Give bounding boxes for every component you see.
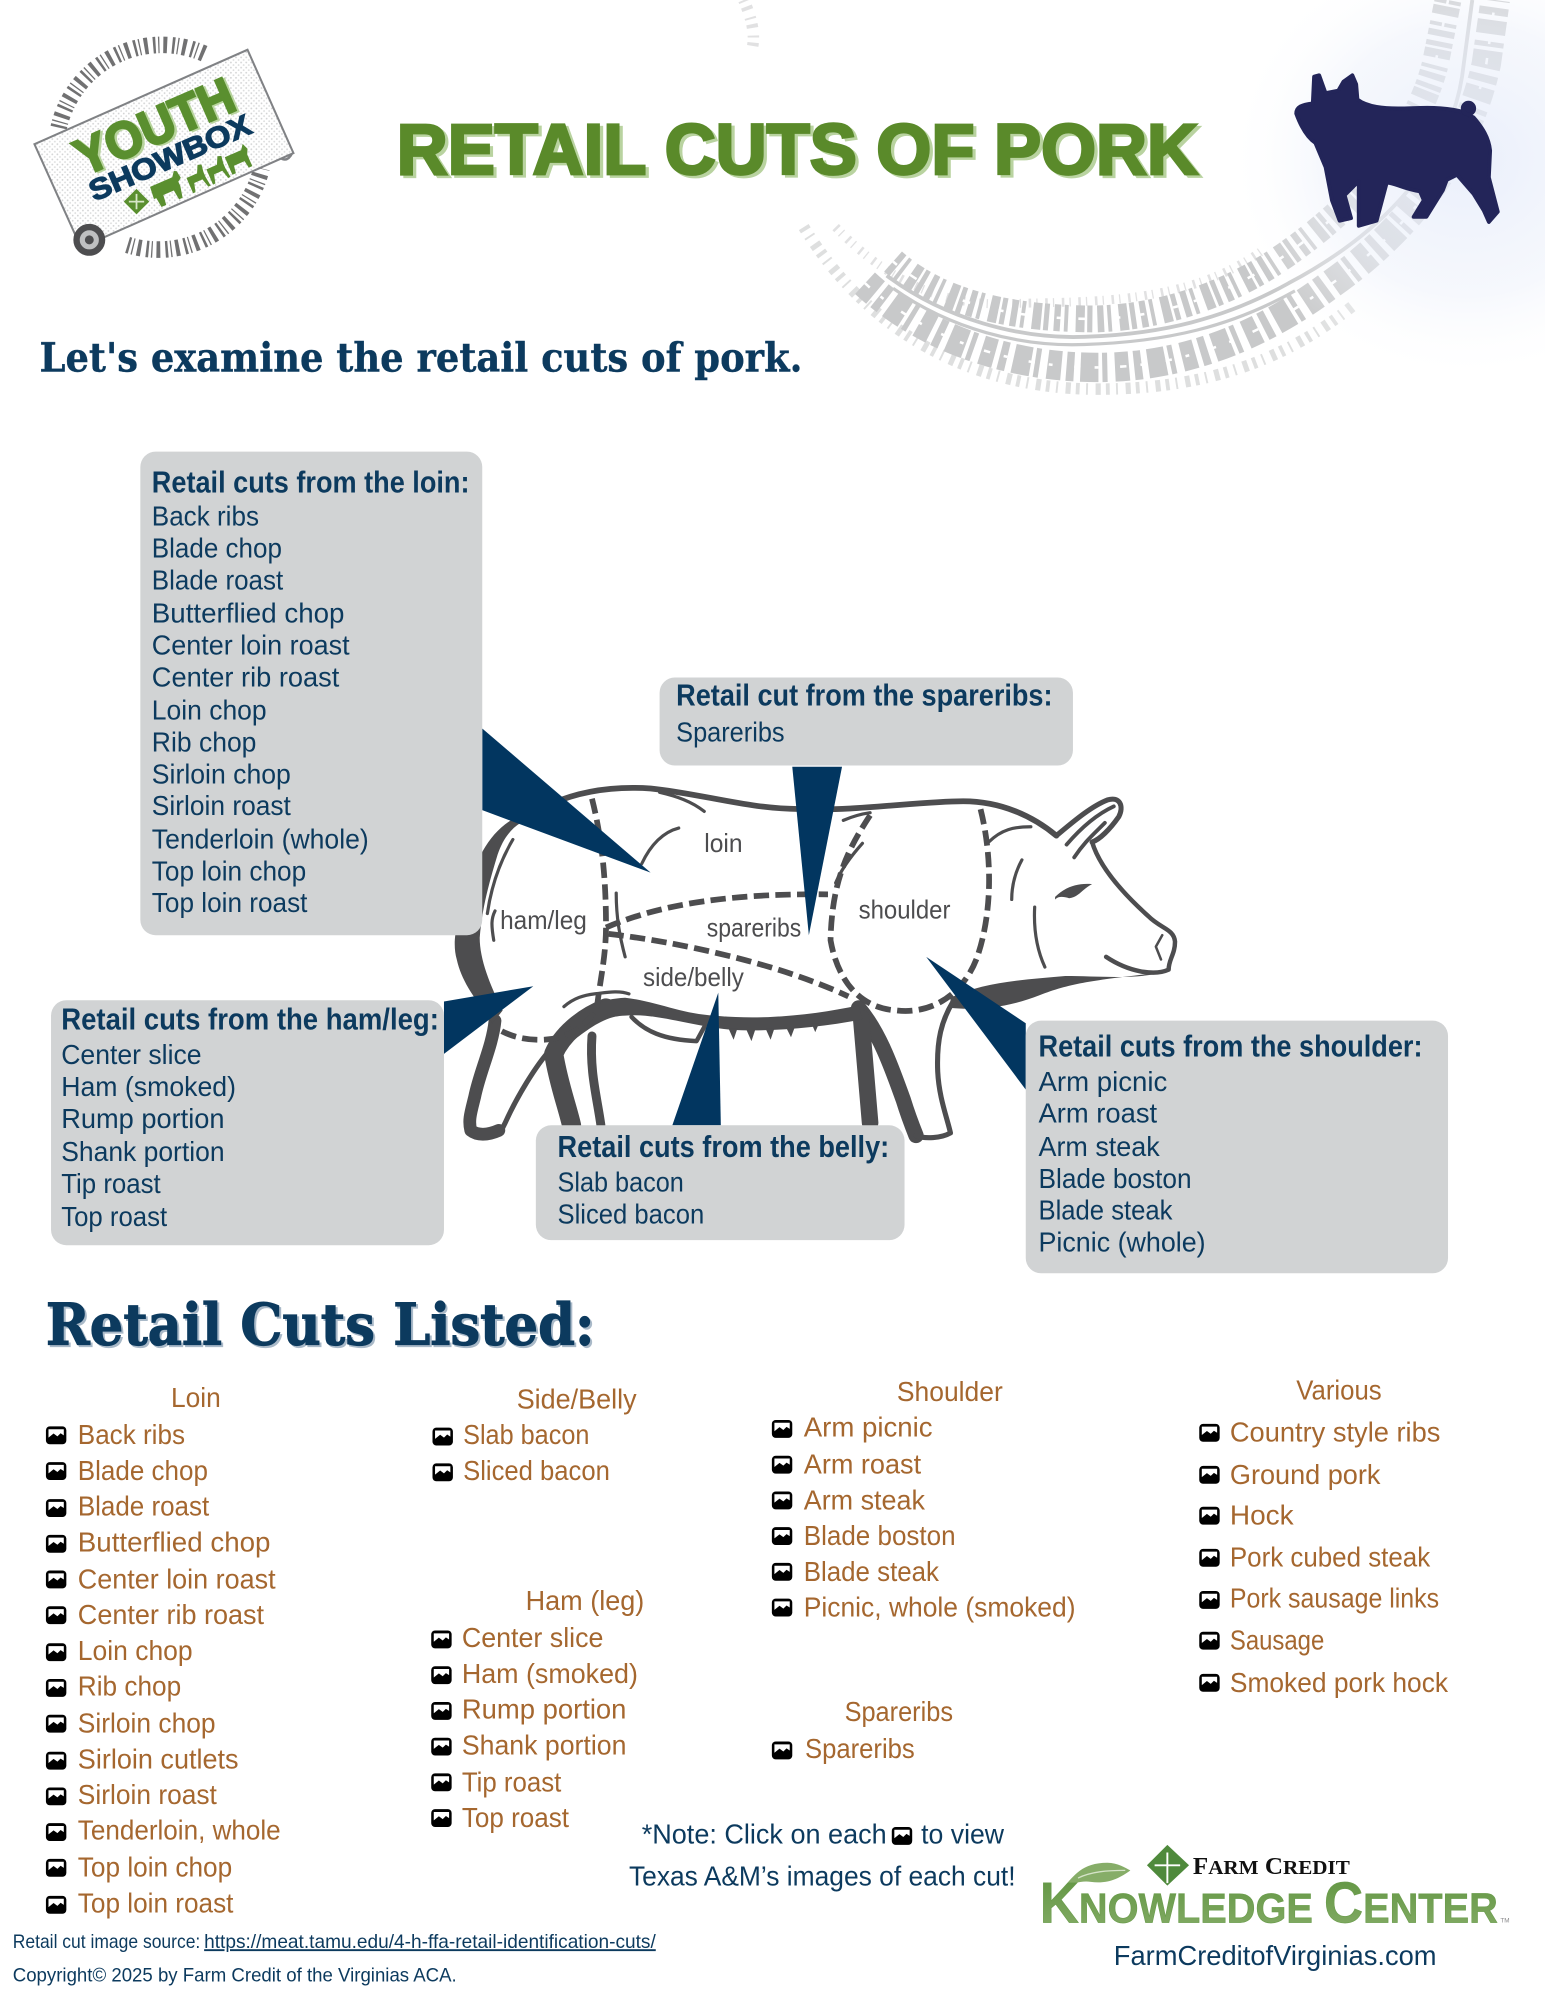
logo: Youth Showbox [34, 45, 293, 253]
list: loin: Sirloin roast [78, 1779, 217, 1810]
panel: loin cuts: Top loin chop [152, 855, 306, 886]
list: spareribs [772, 1696, 953, 1764]
list: shoulder [772, 1376, 1076, 1622]
note: to view [921, 1819, 1005, 1850]
arrow: spareribs pointer [792, 767, 842, 935]
list: various: Hock [1230, 1500, 1295, 1531]
list: ham (leg): Top roast [462, 1802, 569, 1833]
list: loin: Center loin roast [78, 1563, 276, 1594]
panel: shoulder cuts: Arm roast [1039, 1098, 1157, 1129]
list: ham (leg): Ham (smoked) [462, 1658, 638, 1689]
list: shoulder: Blade steak [804, 1556, 940, 1587]
list: loin: Top loin chop [78, 1852, 232, 1883]
list: ham (leg): Center slice [462, 1622, 603, 1653]
list: shoulder: Arm steak [804, 1484, 926, 1515]
list: various: Ground pork [1230, 1459, 1381, 1490]
panel: spareribs cut: Retail cut from the spareribs: [676, 679, 1053, 713]
panel: spareribs cut: Spareribs [676, 716, 785, 747]
panel: shoulder cuts [1026, 1021, 1448, 1273]
panel: loin cuts: Sirloin roast [152, 790, 291, 821]
list: loin: Tenderloin, whole [78, 1815, 281, 1846]
panel: ham/leg cuts: Retail cuts from the ham/leg: [61, 1003, 439, 1037]
panel: shoulder cuts: Arm steak [1039, 1131, 1161, 1162]
list: various: Pork cubed steak [1230, 1542, 1431, 1573]
image source credit: https://meat.tamu.edu/4-h-ffa-retail-identification-cuts/ [204, 1932, 656, 1953]
subtitle: Let's examine the retail cuts of pork. [40, 334, 802, 381]
panel: loin cuts: Blade roast [152, 564, 283, 595]
list: various [1199, 1375, 1449, 1698]
list: spareribs: Spareribs [805, 1733, 915, 1764]
panel: shoulder cuts: Picnic (whole) [1039, 1227, 1206, 1258]
panel: belly cuts: Sliced bacon [558, 1199, 704, 1230]
heading: Retail Cuts Listed: Retail Cuts Listed: [48, 1293, 596, 1361]
list: shoulder: Arm roast [804, 1449, 921, 1480]
list: loin: Rib chop [78, 1671, 181, 1702]
pig region labels: loin [704, 830, 743, 858]
list: shoulder: Shoulder [897, 1376, 1003, 1407]
title: RETAIL CUTS OF PORK [400, 113, 1201, 193]
panel: loin cuts: Blade chop [152, 533, 282, 564]
panel: loin cuts: Center rib roast [152, 661, 340, 692]
pig region labels: ham/leg [500, 907, 587, 935]
list: side/belly: Slab bacon [463, 1419, 589, 1450]
panel: ham/leg cuts: Rump portion [61, 1103, 225, 1134]
list: loin: Blade chop [78, 1455, 208, 1486]
pig region labels: spareribs [707, 914, 801, 942]
pig region labels: shoulder [859, 897, 951, 925]
panel: shoulder cuts: Blade boston [1039, 1163, 1192, 1194]
pig cut lines [499, 799, 989, 1040]
arrow: loin pointer [482, 729, 651, 873]
icon: navy pig silhouette [1296, 75, 1498, 226]
list: side/belly: Side/Belly [517, 1384, 637, 1415]
panel: loin cuts: Rib chop [152, 726, 256, 757]
logo: Youth Showbox: YOUTH [68, 68, 246, 187]
arrow: belly pointer [672, 993, 721, 1125]
logo: Farm Credit Knowledge Center: KNOWLEDGE CENTER [1040, 1872, 1498, 1936]
panel: loin cuts: Loin chop [152, 695, 267, 726]
list: ham (leg): Ham (leg) [526, 1585, 644, 1616]
logo: Farm Credit Knowledge Center: FARM CREDIT [1193, 1853, 1350, 1880]
background tire track and blue glow [744, 0, 1495, 389]
panel: ham/leg cuts: Tip roast [61, 1168, 161, 1199]
arrow: shoulder pointer [926, 957, 1026, 1090]
panel: ham/leg cuts: Shank portion [61, 1136, 225, 1167]
panel: loin cuts: Back ribs [152, 501, 259, 532]
list: side/belly: Sliced bacon [463, 1455, 610, 1486]
panel: belly cuts: Slab bacon [558, 1167, 684, 1198]
list: loin: Butterflied chop [78, 1526, 270, 1557]
heading: Retail Cuts Listed: Retail Cuts Listed: [46, 1291, 595, 1359]
title: RETAIL CUTS OF PORK [397, 110, 1198, 190]
panel: loin cuts: Retail cuts from the loin: [152, 465, 469, 499]
panel: loin cuts: Tenderloin (whole) [152, 823, 369, 854]
list: loin: Blade roast [78, 1491, 209, 1522]
list: side/belly [432, 1384, 637, 1486]
list: shoulder: Arm picnic [804, 1412, 933, 1443]
list: various: Sausage [1230, 1625, 1324, 1656]
list: loin: Back ribs [78, 1419, 185, 1450]
logo: Farm Credit Knowledge Center: TM [1500, 1918, 1510, 1925]
copyright: Copyright© 2025 by Farm Credit of the Virginias ACA. [13, 1965, 457, 1986]
note: Texas A&M’s images of each cut! [629, 1861, 1016, 1892]
panel: shoulder cuts: Retail cuts from the shoulder: [1039, 1029, 1423, 1063]
panel: belly cuts: Retail cuts from the belly: [558, 1130, 889, 1164]
list: ham (leg) [431, 1585, 644, 1833]
pig underside [455, 817, 1164, 1041]
list: various: Smoked pork hock [1230, 1667, 1449, 1698]
arrow: ham pointer [444, 986, 533, 1054]
background blue glow [1225, 0, 1545, 383]
list: loin: Loin chop [78, 1635, 193, 1666]
list: shoulder: Picnic, whole (smoked) [804, 1591, 1076, 1622]
list: shoulder: Blade boston [804, 1520, 956, 1551]
pig diagram [455, 788, 1175, 1138]
list: various: Pork sausage links [1230, 1583, 1439, 1614]
panel: ham/leg cuts: Ham (smoked) [61, 1071, 236, 1102]
list: loin: Sirloin chop [78, 1708, 216, 1739]
list: loin: Sirloin cutlets [78, 1743, 239, 1774]
note [629, 1819, 1016, 1892]
list: spareribs: Spareribs [845, 1696, 953, 1727]
logo: Youth Showbox: SHOWBOX [84, 108, 257, 208]
list: ham (leg): Shank portion [462, 1729, 626, 1760]
panel: shoulder cuts: Arm picnic [1039, 1066, 1167, 1097]
logo: Youth Showbox: YOUTH [66, 67, 243, 186]
list: various: Country style ribs [1230, 1417, 1440, 1448]
list: loin: Loin [171, 1382, 221, 1413]
pig region labels: side/belly [643, 964, 744, 992]
panel: ham/leg cuts [51, 1000, 444, 1245]
panel: loin cuts: Butterflied chop [152, 598, 344, 629]
panel: loin cuts: Sirloin chop [152, 758, 291, 789]
panel: loin cuts: Top loin roast [152, 887, 308, 918]
panel: loin cuts: Center loin roast [152, 630, 350, 661]
list: ham (leg): Rump portion [462, 1694, 626, 1725]
panel: ham/leg cuts: Center slice [61, 1039, 202, 1070]
panel: loin cuts [140, 452, 482, 935]
list: loin [46, 1382, 281, 1918]
logo: Farm Credit Knowledge Center [1040, 1845, 1510, 1936]
list: loin: Center rib roast [78, 1599, 264, 1630]
note: *Note: Click on each [642, 1819, 887, 1850]
panel: ham/leg cuts: Top roast [61, 1201, 167, 1232]
pig outline [470, 788, 1175, 1138]
panel: shoulder cuts: Blade steak [1039, 1195, 1173, 1226]
website: FarmCreditofVirginias.com [1114, 1940, 1437, 1971]
list: loin: Top loin roast [78, 1887, 234, 1918]
panel: belly cuts [536, 1125, 905, 1240]
image source credit: Retail cut image source: [13, 1932, 200, 1953]
panel: spareribs cut [660, 677, 1073, 766]
pig region labels [500, 830, 951, 992]
list: various: Various [1296, 1375, 1382, 1406]
list: ham (leg): Tip roast [462, 1766, 562, 1797]
